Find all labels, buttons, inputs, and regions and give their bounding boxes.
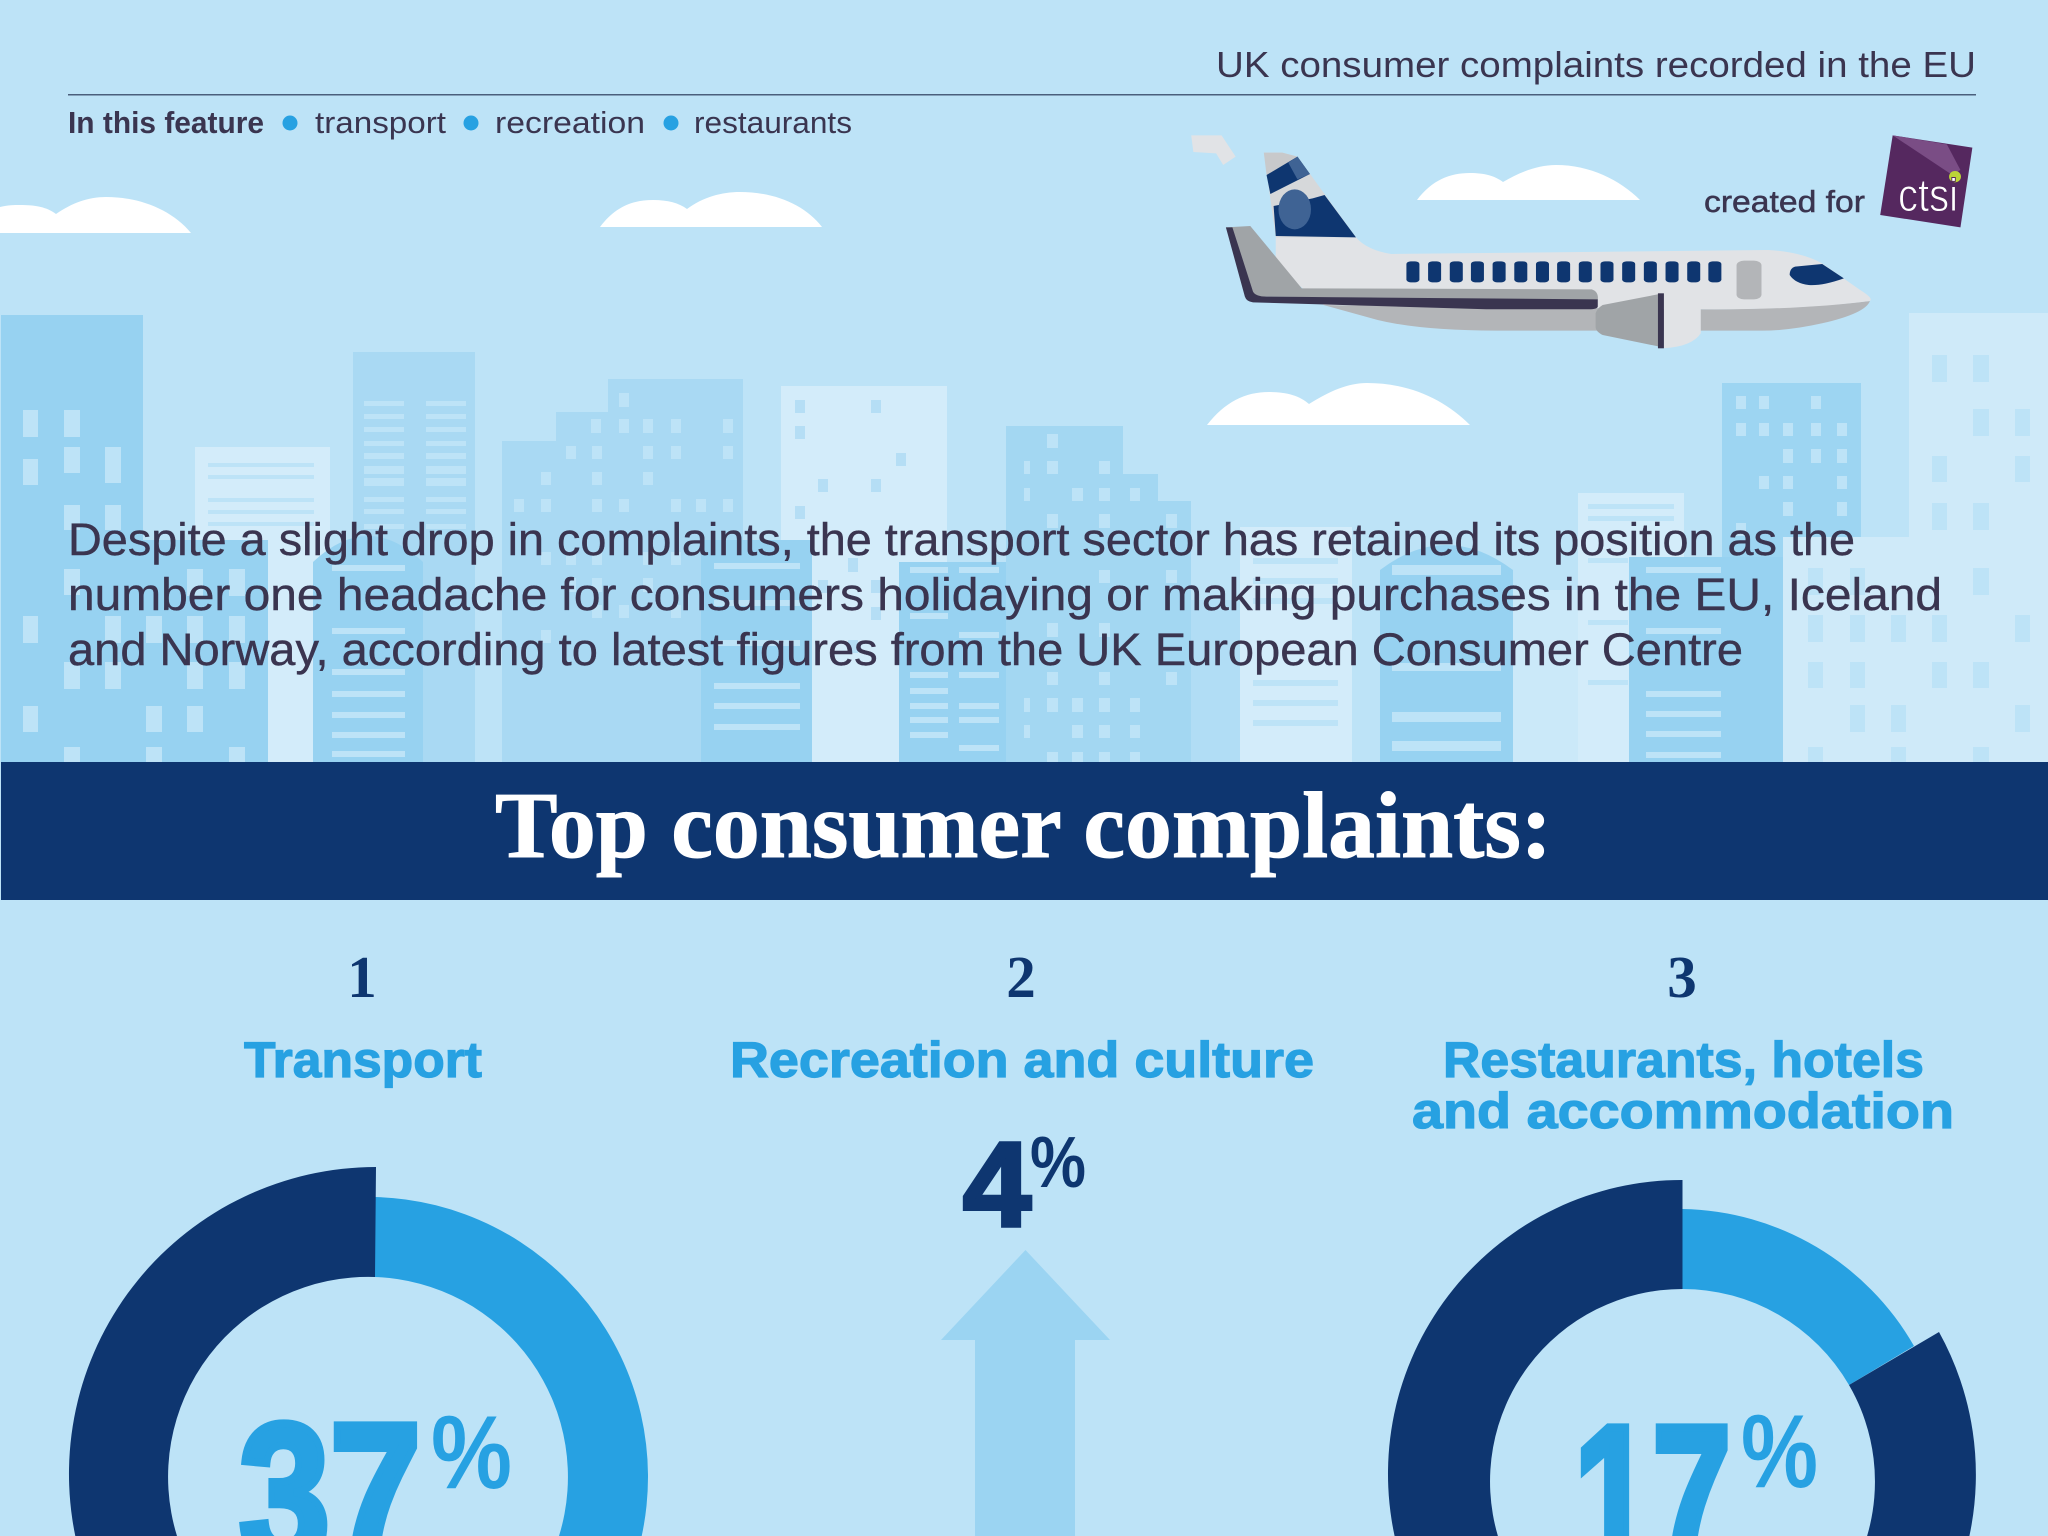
intro paragraph: number one headache for consumers holidaying or making purchases in the EU, Iceland bbox=[68, 569, 1942, 620]
ctsi logo: ctsi bbox=[1898, 169, 1958, 221]
created for label: created for bbox=[1704, 184, 1865, 219]
city skyline background bbox=[1, 313, 2048, 762]
feature nav: transport bbox=[315, 105, 446, 140]
feature nav bbox=[68, 105, 852, 140]
column 1: transport bbox=[69, 944, 648, 1536]
header title: UK consumer complaints recorded in the EU bbox=[1216, 44, 1976, 85]
column 3: restaurants, hotels and accommodation: Restaurants, hotels bbox=[1443, 1032, 1924, 1088]
up arrow bbox=[941, 1250, 1110, 1536]
donut chart: 37% bbox=[69, 1167, 648, 1536]
column 2: recreation and culture: Recreation and culture bbox=[730, 1032, 1314, 1088]
clouds bbox=[0, 165, 1640, 425]
feature nav: restaurants bbox=[694, 105, 852, 140]
donut chart: 37%: % bbox=[431, 1395, 512, 1511]
column 1: transport: Transport bbox=[244, 1032, 482, 1088]
stat: 4%: 4 bbox=[963, 1118, 1031, 1252]
intro paragraph: and Norway, according to latest figures from the UK European Consumer Centre bbox=[68, 624, 1743, 675]
column 2: recreation and culture bbox=[730, 944, 1314, 1536]
column 3: restaurants, hotels and accommodation: 3 bbox=[1667, 944, 1697, 1010]
donut chart: 17%: % bbox=[1741, 1394, 1818, 1510]
column 3: restaurants, hotels and accommodation: and accommodation bbox=[1412, 1083, 1954, 1139]
feature nav: recreation bbox=[495, 105, 645, 140]
ctsi logo bbox=[1880, 135, 1972, 227]
aeroplane illustration bbox=[1191, 135, 1871, 348]
stat: 4%: % bbox=[1030, 1123, 1086, 1203]
header rule bbox=[68, 94, 1976, 96]
intro paragraph: Despite a slight drop in complaints, the transport sector has retained its position as the bbox=[68, 514, 1855, 565]
column 1: transport: 1 bbox=[347, 944, 377, 1010]
column 3: restaurants, hotels and accommodation bbox=[1388, 944, 1976, 1536]
intro paragraph bbox=[68, 514, 1942, 675]
stat: 4% bbox=[963, 1118, 1086, 1252]
section banner bbox=[1, 762, 2048, 900]
column 2: recreation and culture: 2 bbox=[1006, 944, 1036, 1010]
feature nav: In this feature bbox=[68, 105, 264, 140]
banner heading: Top consumer complaints: bbox=[495, 774, 1552, 878]
donut chart: 17% bbox=[1388, 1180, 1976, 1536]
